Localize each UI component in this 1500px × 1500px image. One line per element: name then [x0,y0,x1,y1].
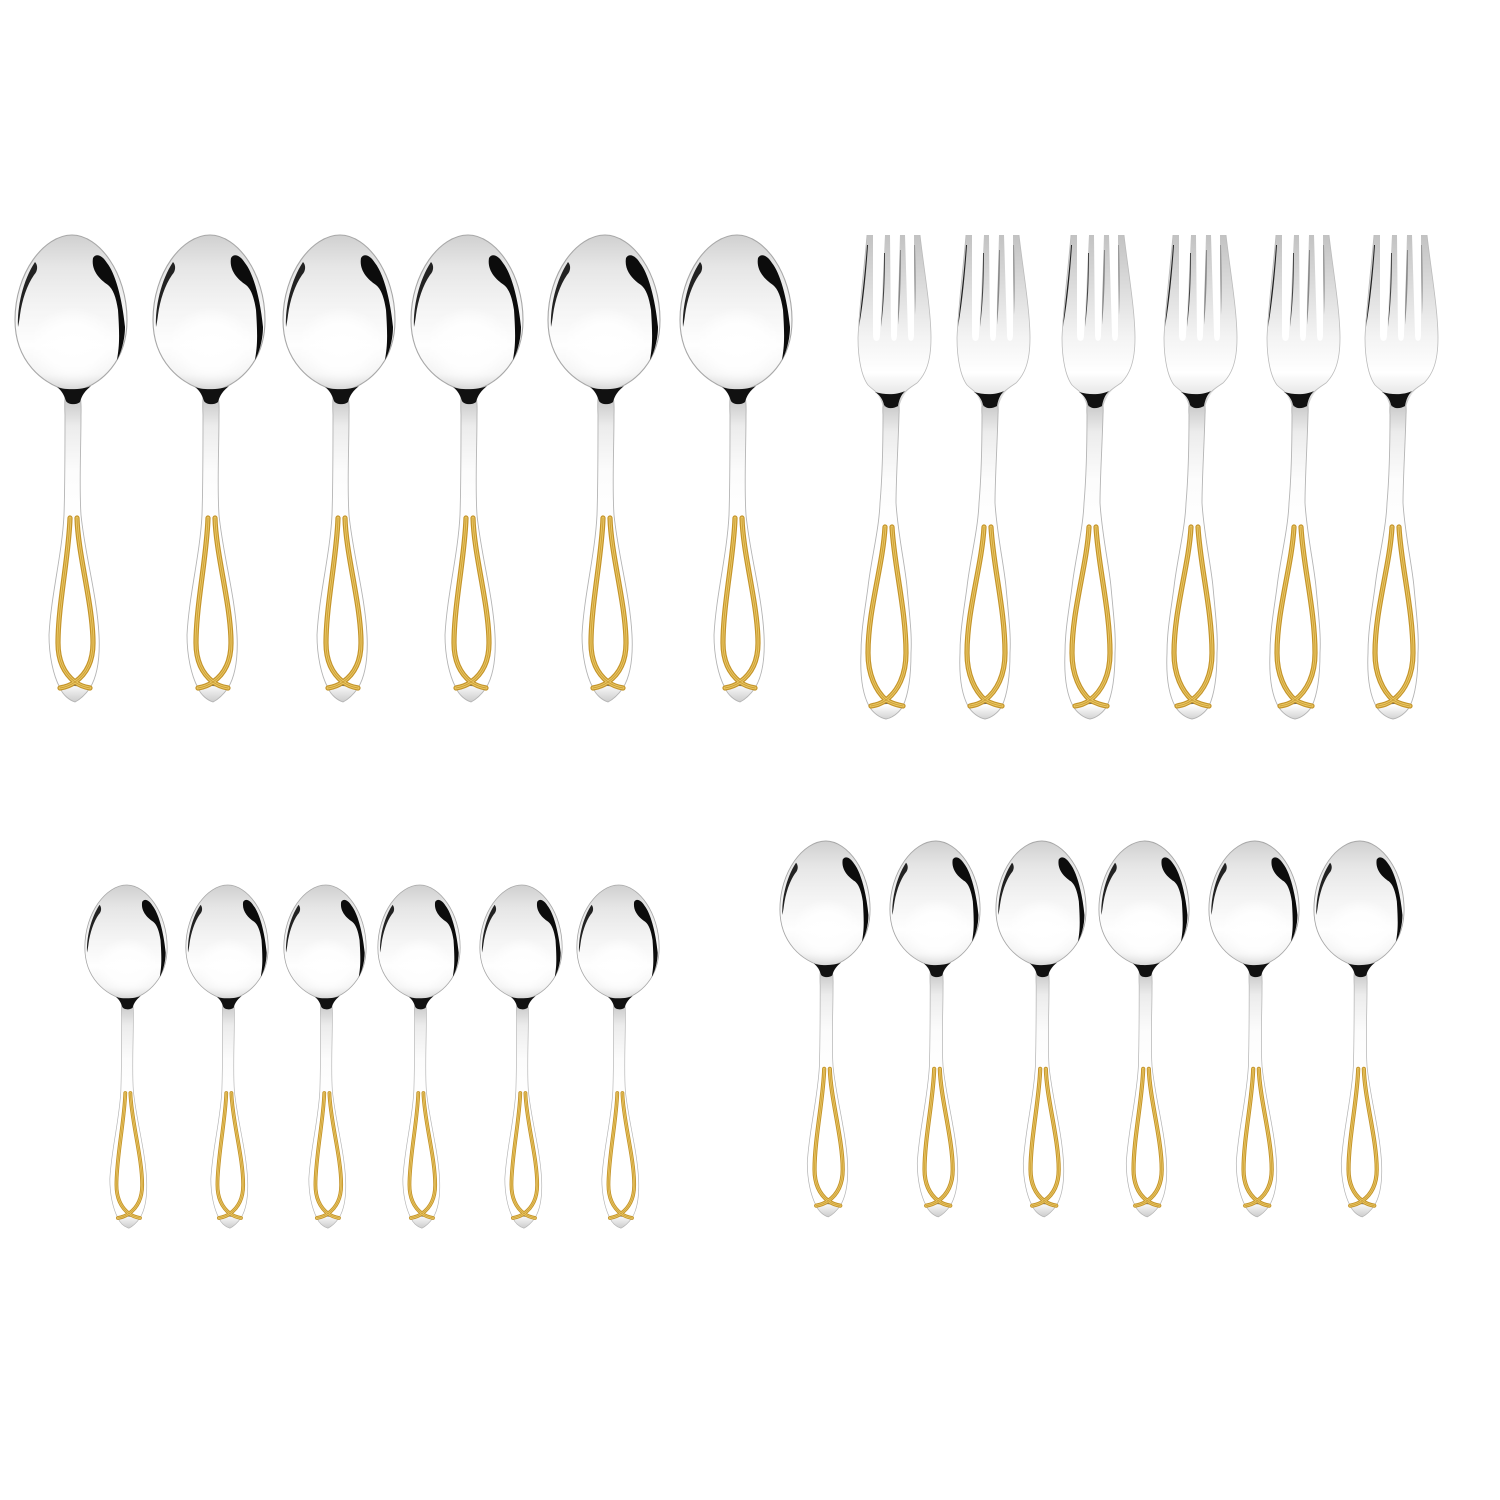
medium spoon 6 [1314,841,1404,1217]
medium spoon 1 [780,841,870,1217]
small spoon 2 [186,885,268,1228]
medium spoon 2 [890,841,980,1217]
small spoon 4 [378,885,460,1228]
group: medium spoons [780,841,1404,1217]
small spoon 5 [480,885,562,1228]
large spoon 2 [153,235,265,702]
fork 6 [1365,235,1438,719]
small spoon 6 [577,885,659,1228]
small spoon 1 [85,885,167,1228]
group: forks [858,235,1438,719]
large spoon 4 [411,235,523,702]
group: large spoons [15,235,792,702]
large spoon 6 [680,235,792,702]
large spoon 3 [283,235,395,702]
medium spoon 5 [1209,841,1299,1217]
medium spoon 3 [996,841,1086,1217]
fork 2 [957,235,1030,719]
medium spoon 4 [1099,841,1189,1217]
large spoon 1 [15,235,127,702]
group: small spoons [85,885,659,1228]
fork 3 [1062,235,1135,719]
fork 4 [1164,235,1237,719]
large spoon 5 [548,235,660,702]
fork 5 [1267,235,1340,719]
fork 1 [858,235,931,719]
small spoon 3 [284,885,366,1228]
